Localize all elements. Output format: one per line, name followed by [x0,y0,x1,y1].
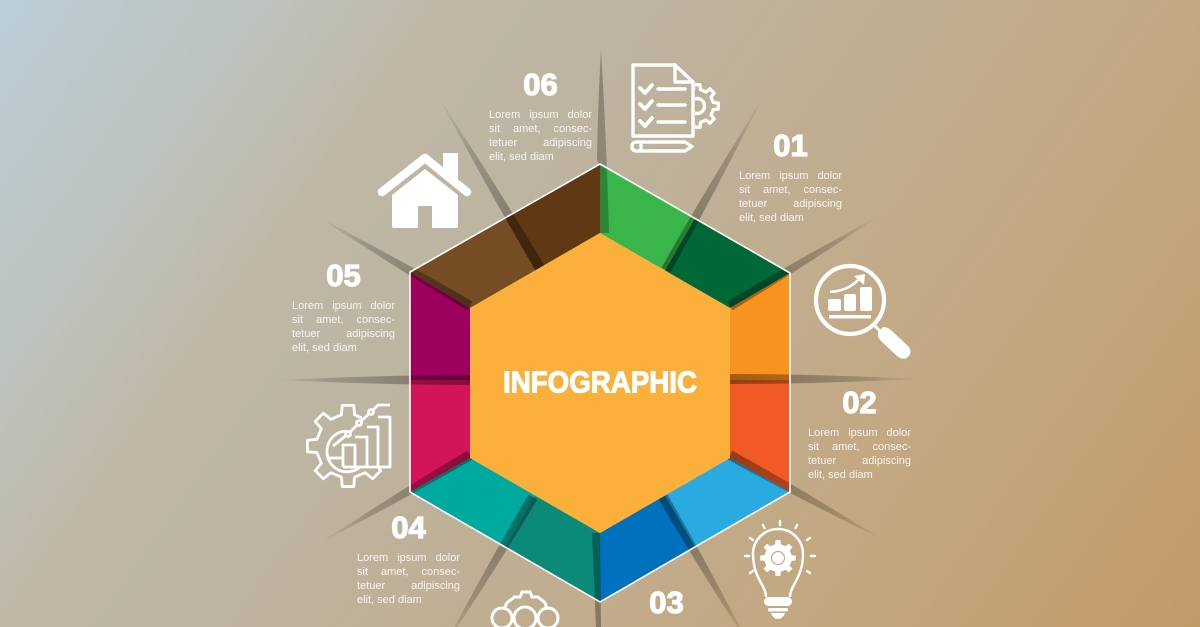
text block: step 02 [808,385,911,481]
icon: gears [492,592,558,627]
text block: step 05: sit amet, consec- [292,314,395,326]
text block: step 05: tetuer adipiscing [292,328,395,340]
text block: step 04: elit, sed diam [357,594,422,606]
icon: gear with growth chart [307,405,390,487]
text block: step 02: tetuer adipiscing [808,455,911,467]
text block: step 01: 01 [773,128,808,163]
text block: step 05 [292,258,395,354]
text block: step 06: 06 [523,67,558,102]
text block: step 04: sit amet, consec- [357,566,460,578]
segment 06: brown [410,164,600,308]
text block: step 02: elit, sed diam [808,469,873,481]
text block: step 06: tetuer adipiscing [489,137,592,149]
icon: light bulb with gear [745,521,815,619]
text block: step 04: Lorem ipsum dolor [357,552,460,564]
radiating shadow rays [276,50,920,627]
icon: checklist document with gear [632,65,718,151]
text block: step 03: 03 [649,585,684,620]
text block: step 06: sit amet, consec- [489,123,592,135]
hexagon ring segments [410,164,790,602]
segment 03: blue [600,458,790,602]
segment 05: magenta [410,272,470,492]
text block: step 06: elit, sed diam [489,151,554,163]
segment 02: orange [730,273,790,492]
icon: house [382,153,467,228]
text block: step 04: 04 [391,510,426,545]
text block: step 05: 05 [326,258,361,293]
text block: step 04: tetuer adipiscing [357,580,460,592]
hexagon outer outline [410,164,790,602]
segment 04: teal [410,458,600,602]
text block: step 01 [739,128,842,224]
segment 01: green [600,164,790,308]
text block: step 02: sit amet, consec- [808,441,911,453]
central hexagon [470,233,730,533]
text block: step 04 [357,510,460,606]
text block: step 01: sit amet, consec- [739,184,842,196]
title: INFOGRAPHIC [503,364,697,400]
text block: step 06 [489,67,592,163]
text block: step 06: Lorem ipsum dolor [489,109,592,121]
text block: step 05: elit, sed diam [292,342,357,354]
icon: magnifying glass with chart [816,266,910,359]
text block: step 05: Lorem ipsum dolor [292,300,395,312]
text block: step 01: tetuer adipiscing [739,198,842,210]
text block: step 02: Lorem ipsum dolor [808,427,911,439]
text block: step 01: elit, sed diam [739,212,804,224]
text block: step 01: Lorem ipsum dolor [739,170,842,182]
text block: step 02: 02 [842,385,877,420]
